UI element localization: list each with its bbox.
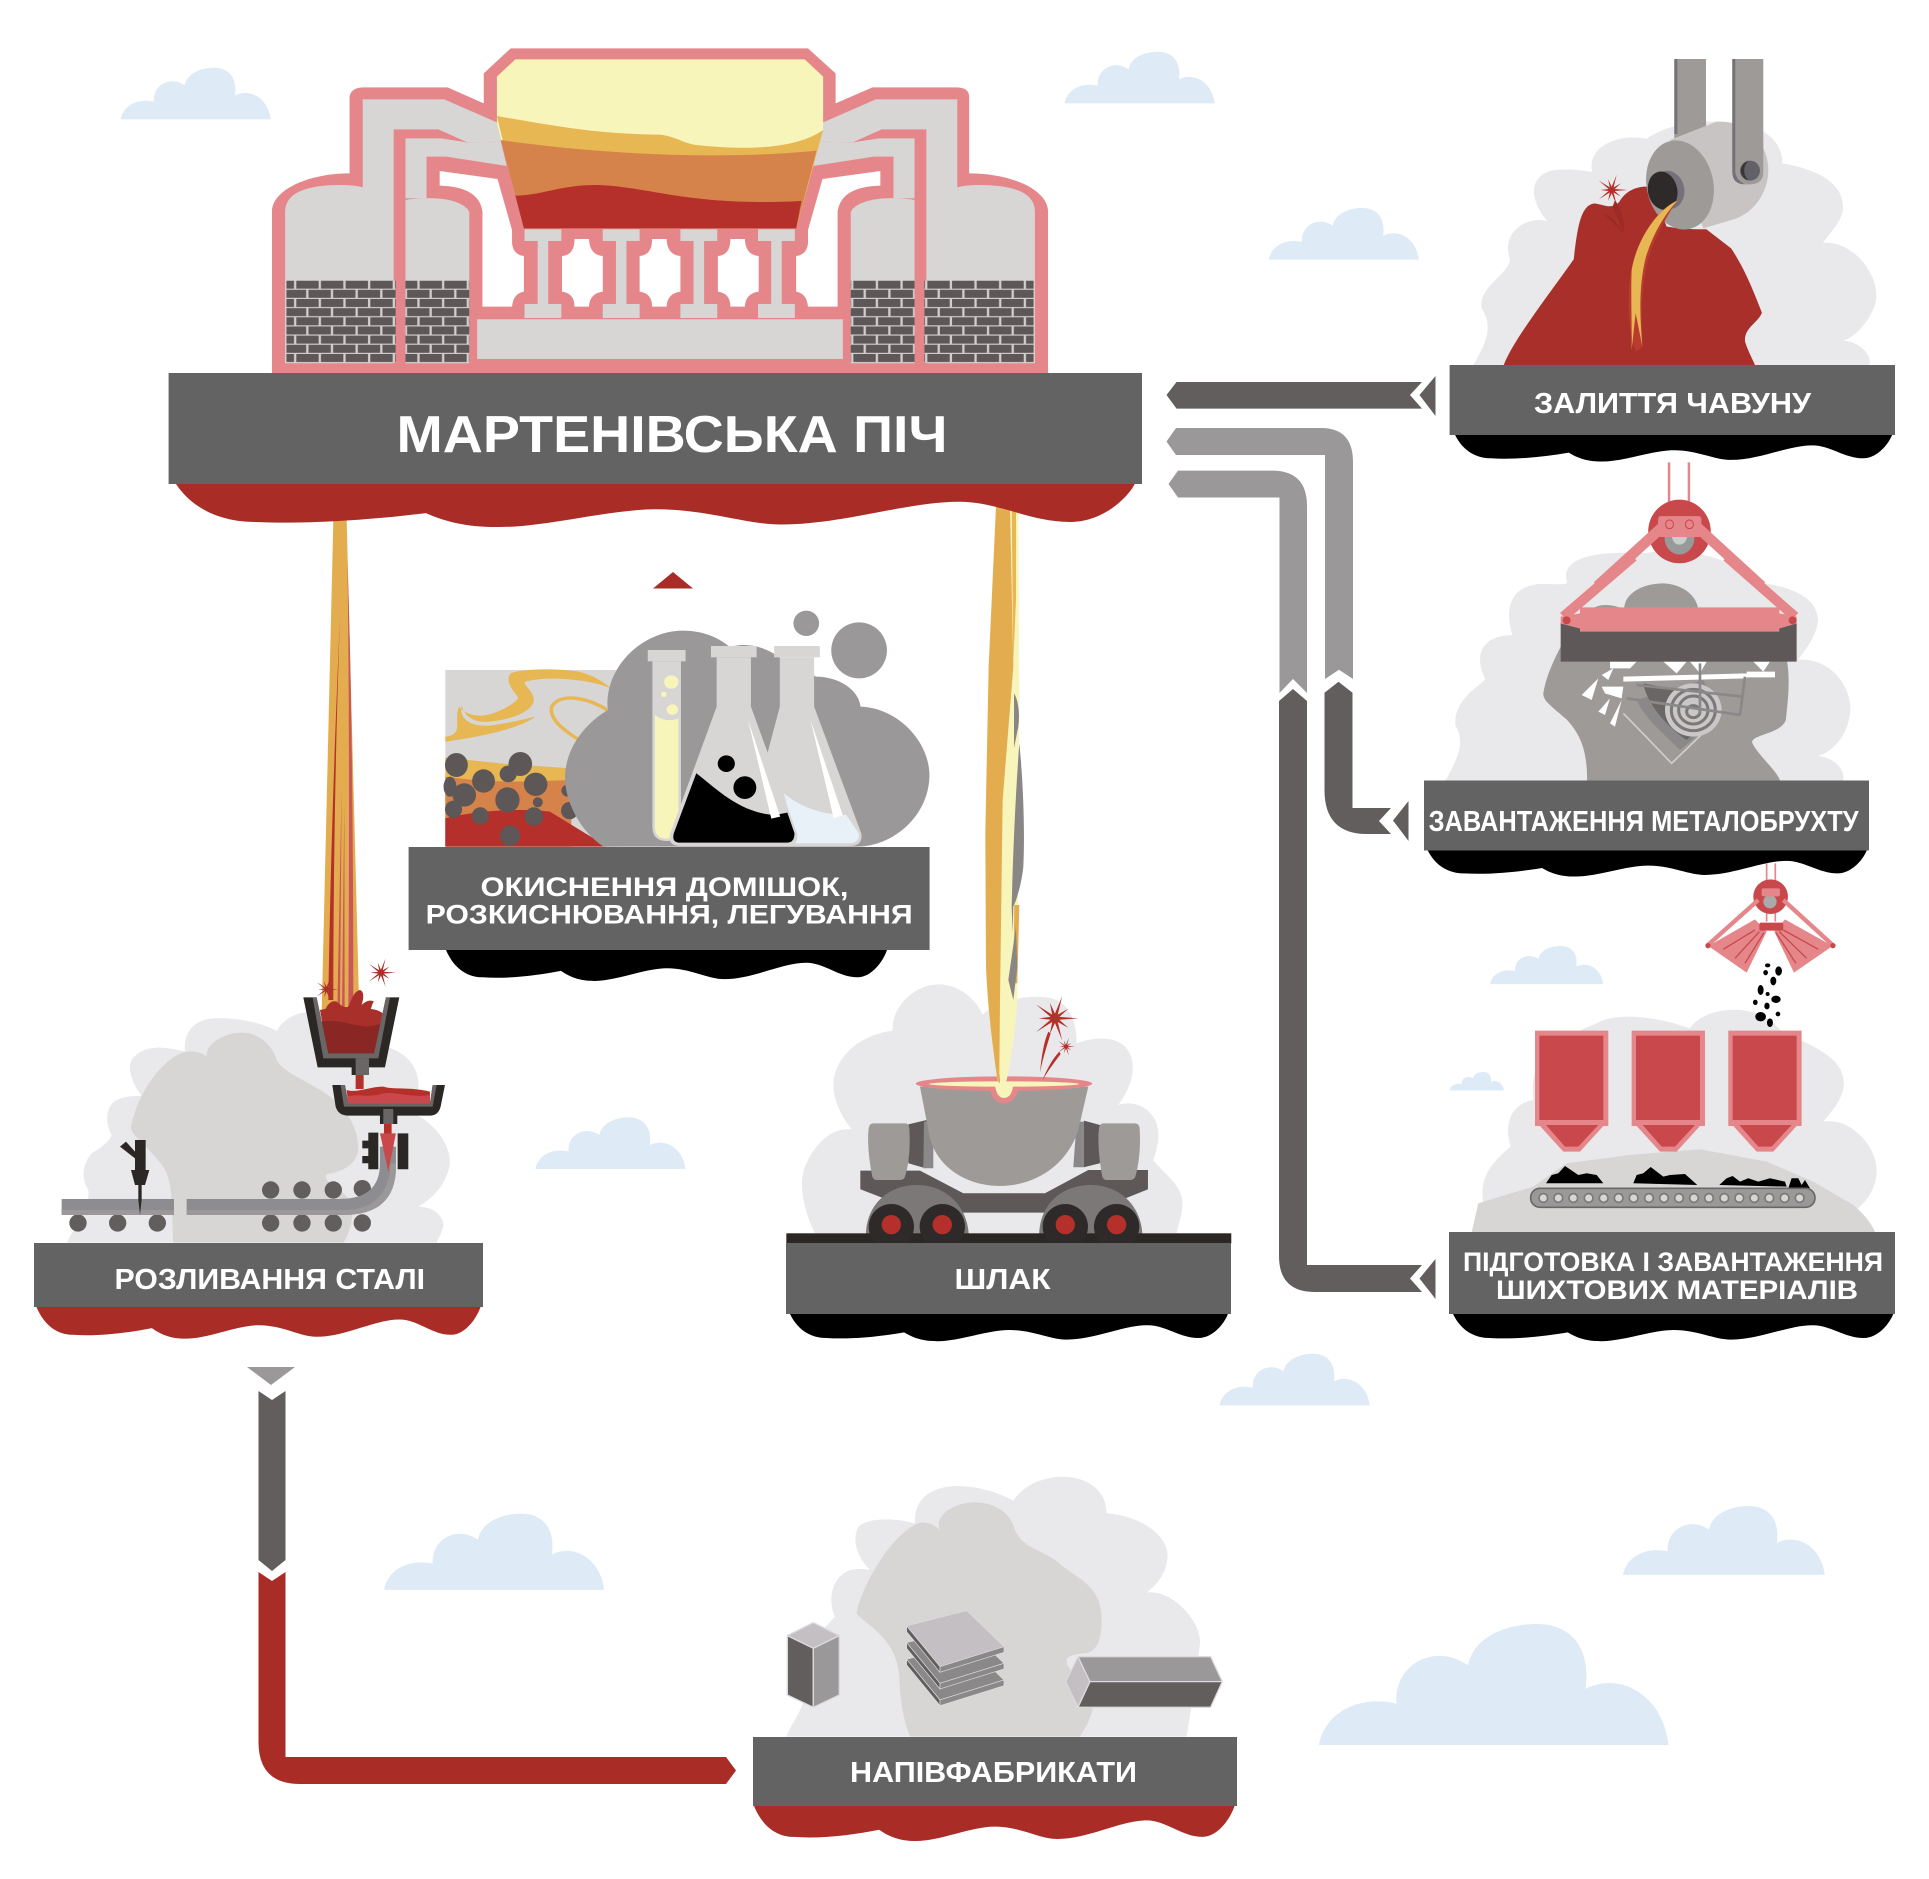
background clouds bbox=[121, 52, 1825, 1745]
billet bbox=[787, 1623, 839, 1707]
illustration: open-hearth furnace bbox=[272, 48, 1048, 374]
stream: steel to casting bbox=[322, 520, 359, 1013]
label: ШЛАК bbox=[954, 1264, 1051, 1296]
steel bar bbox=[1066, 1657, 1222, 1707]
illustration: pouring steel bbox=[62, 958, 450, 1243]
label: НАПІВФАБРИКАТИ bbox=[850, 1757, 1137, 1789]
label line 1: ОКИСНЕННЯ ДОМІШОК, bbox=[480, 872, 848, 902]
panel: semi-finished products bbox=[753, 1737, 1237, 1841]
stream: slag bbox=[985, 507, 1024, 1087]
label: ЗАЛИТТЯ ЧАВУНУ bbox=[1534, 388, 1812, 420]
panel: scrap loading bbox=[1424, 780, 1869, 877]
label line 2: РОЗКИСНЮВАННЯ, ЛЕГУВАННЯ bbox=[426, 900, 913, 930]
arrow: iron to furnace bbox=[1166, 376, 1436, 416]
arrow: casting to semi-finished products bbox=[247, 1367, 736, 1784]
left half structure bbox=[285, 99, 524, 363]
right half structure bbox=[796, 99, 1035, 363]
label: РОЗЛИВАННЯ СТАЛІ bbox=[114, 1264, 425, 1296]
label line 2: ШИХТОВИХ МАТЕРІАЛІВ bbox=[1496, 1275, 1858, 1305]
marker: red triangle bbox=[653, 572, 693, 588]
illustration: semi-finished products bbox=[787, 1477, 1222, 1737]
hoppers bbox=[1535, 1031, 1802, 1152]
grab crane bbox=[1705, 863, 1836, 973]
title: МАРТЕНІВСЬКА ПІЧ bbox=[396, 406, 948, 464]
label: ЗАВАНТАЖЕННЯ МЕТАЛОБРУХТУ bbox=[1429, 806, 1859, 838]
illustration: pouring iron bbox=[1473, 59, 1876, 365]
label line 1: ПІДГОТОВКА І ЗАВАНТАЖЕННЯ bbox=[1463, 1247, 1883, 1277]
illustration: slag ladle car bbox=[786, 984, 1231, 1249]
panel: slag bbox=[786, 1243, 1231, 1341]
illustration: oxidation and flasks bbox=[444, 611, 929, 847]
arrow: charge materials to furnace bbox=[1168, 471, 1436, 1299]
panel: furnace bbox=[169, 373, 1142, 527]
panel: oxidation bbox=[409, 847, 930, 981]
illustration: scrap loading bbox=[1446, 462, 1850, 780]
stacked plates bbox=[907, 1611, 1004, 1706]
panel: pouring steel bbox=[34, 1243, 483, 1339]
panel: pouring iron bbox=[1450, 365, 1895, 462]
panel: charge materials bbox=[1449, 1232, 1895, 1341]
arrow: scrap to furnace bbox=[1166, 428, 1408, 841]
illustration: charge materials bbox=[1472, 863, 1877, 1232]
